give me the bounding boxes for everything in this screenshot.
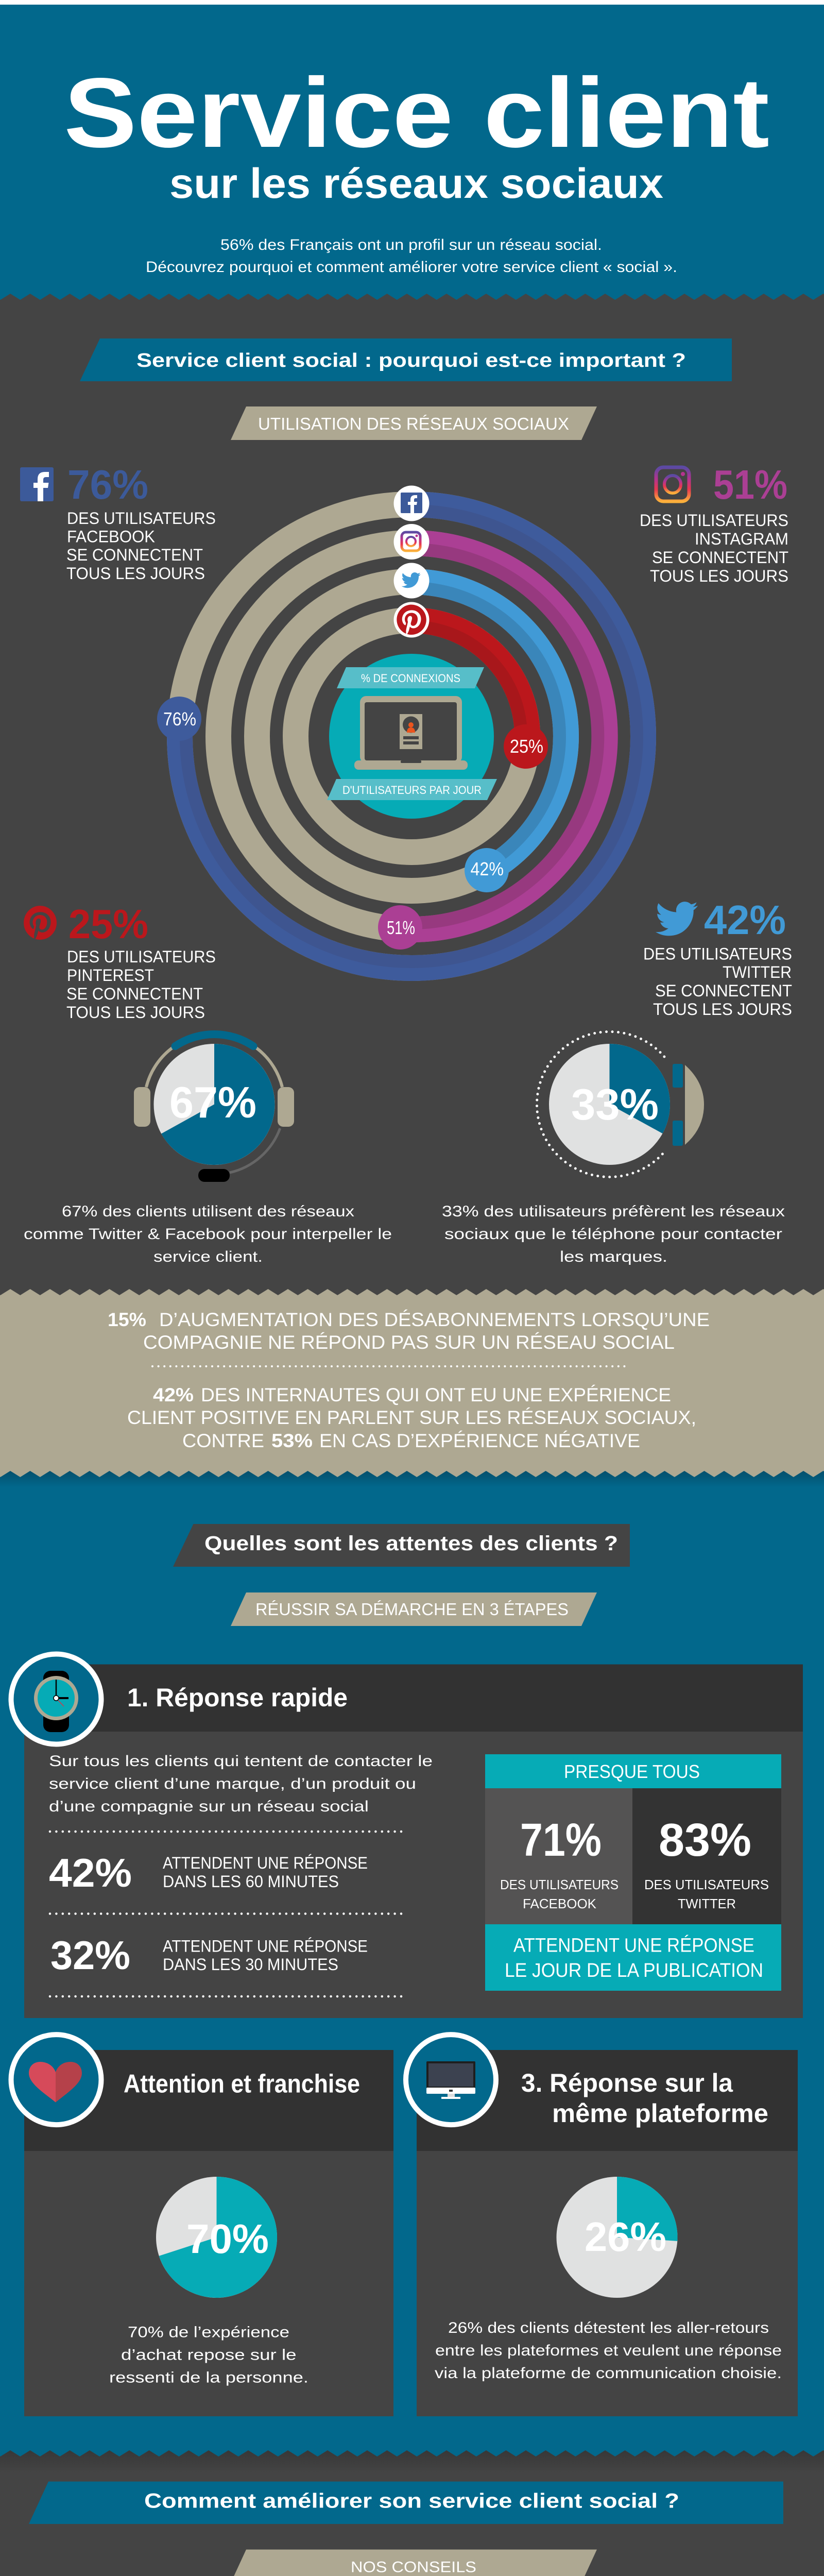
bubble: 51% bbox=[378, 905, 422, 950]
heading: attentes des clients: Quelles sont les attentes des clients ? bbox=[204, 1532, 618, 1555]
description: TWITTER bbox=[723, 963, 792, 981]
description: DES UTILISATEURS bbox=[67, 947, 216, 966]
text: 67% caption bbox=[24, 1203, 392, 1265]
description: TOUS LES JOURS bbox=[650, 567, 788, 585]
caption: ressenti de la personne. bbox=[109, 2369, 308, 2386]
stat: 42%: 42% bbox=[49, 1850, 132, 1895]
heading: pourquoi est-ce important: Service client social : pourquoi est-ce important ? bbox=[136, 350, 686, 371]
icon: monitor bbox=[406, 2035, 496, 2125]
description: DES UTILISATEURS bbox=[67, 509, 216, 528]
text: 33% caption bbox=[442, 1203, 785, 1265]
fact: 15%: COMPAGNIE NE RÉPOND PAS SUR UN RÉSEAU SOCIAL bbox=[143, 1332, 675, 1353]
panel title: Attention et franchise bbox=[124, 2069, 360, 2098]
bubble: 51%: 51% bbox=[387, 917, 415, 938]
intro text bbox=[49, 1753, 433, 1815]
ring: instagram 51% bbox=[400, 543, 605, 929]
intro text: Découvrez pourquoi et comment améliorer votre service client « social ». bbox=[146, 259, 677, 276]
text: 67% caption: 67% des clients utilisent des réseaux bbox=[62, 1203, 354, 1220]
stat: 71% facebook bbox=[500, 1815, 619, 1911]
fact: 42%: EN CAS D’EXPÉRIENCE NÉGATIVE bbox=[319, 1430, 640, 1451]
figure: 25% bbox=[68, 901, 148, 947]
fact: 15%: 15% bbox=[108, 1309, 146, 1330]
pie chart: 67% with headset: 67% bbox=[169, 1078, 256, 1127]
fact: 42% bbox=[127, 1384, 696, 1451]
ring: twitter 42% bbox=[411, 582, 566, 871]
ring: facebook 76% bbox=[180, 504, 643, 968]
figure: 42% bbox=[704, 897, 786, 943]
description: DES UTILISATEURS bbox=[640, 511, 788, 530]
stat: 32%: ATTENDENT UNE RÉPONSE bbox=[163, 1937, 368, 1956]
subtitle: sur les réseaux sociaux bbox=[169, 160, 663, 207]
icon: facebook bbox=[20, 467, 54, 501]
panel title: même plateforme bbox=[552, 2099, 768, 2128]
icon: headset bbox=[134, 1034, 294, 1182]
stat: 32%: DANS LES 30 MINUTES bbox=[163, 1955, 338, 1974]
description: SE CONNECTENT bbox=[652, 548, 788, 567]
intro text: d’une compagnie sur un réseau social bbox=[49, 1798, 369, 1815]
fact: 15%: D’AUGMENTATION DES DÉSABONNEMENTS LORSQU’UNE bbox=[159, 1309, 710, 1330]
subheading: réussir sa démarche bbox=[231, 1592, 597, 1626]
stat: 83% twitter: DES UTILISATEURS bbox=[644, 1877, 769, 1892]
bubble: 25%: 25% bbox=[510, 736, 543, 757]
stat: 42%: ATTENDENT UNE RÉPONSE bbox=[163, 1854, 368, 1872]
ring tracks bbox=[180, 504, 643, 968]
bubble: 42%: 42% bbox=[471, 858, 504, 879]
heading: attentes des clients bbox=[173, 1524, 630, 1567]
pie chart: 26% bbox=[556, 2177, 678, 2298]
fact: 42%: 53% bbox=[271, 1430, 313, 1451]
intro text: Sur tous les clients qui tentent de contacter le bbox=[49, 1753, 433, 1770]
ribbon: d'utilisateurs par jour bbox=[327, 779, 497, 800]
caption: via la plateforme de communication choisie. bbox=[435, 2365, 782, 2382]
header bbox=[64, 57, 769, 276]
caption: 70% de l’expérience bbox=[128, 2324, 289, 2341]
icon: watch bbox=[11, 1654, 101, 1744]
subheading: nos conseils bbox=[231, 2550, 597, 2576]
callout table: presque tous: PRESQUE TOUS bbox=[564, 1761, 700, 1782]
pie chart: 33% with phone bbox=[537, 1031, 704, 1177]
description: SE CONNECTENT bbox=[66, 546, 203, 564]
description: SE CONNECTENT bbox=[66, 985, 203, 1003]
subheading: utilisation des réseaux sociaux: UTILISATION DES RÉSEAUX SOCIAUX bbox=[258, 414, 569, 433]
description: DES UTILISATEURS bbox=[643, 945, 792, 963]
fact: 42%: 42% bbox=[153, 1384, 194, 1405]
caption: entre les plateformes et veulent une réponse bbox=[435, 2342, 782, 2359]
radial chart: % de connexions d'utilisateurs par jour bbox=[157, 485, 643, 968]
icon: pinterest badge bbox=[393, 602, 430, 638]
description: TOUS LES JOURS bbox=[653, 1000, 792, 1019]
description: PINTEREST bbox=[67, 966, 154, 985]
stat: 42% bbox=[49, 1850, 368, 1895]
panel title: 1. Réponse rapide bbox=[127, 1683, 348, 1712]
ring: pinterest 25% bbox=[411, 620, 527, 747]
stat: 32% bbox=[50, 1933, 368, 1978]
heading: comment améliorer: Comment améliorer son service client social ? bbox=[144, 2490, 679, 2513]
heading: comment améliorer bbox=[29, 2482, 783, 2524]
fact: 42%: CLIENT POSITIVE EN PARLENT SUR LES RÉSEAUX SOCIAUX, bbox=[127, 1407, 696, 1428]
caption bbox=[435, 2319, 782, 2382]
pie chart: 33% with phone: 33% bbox=[571, 1080, 659, 1129]
description: INSTAGRAM bbox=[695, 530, 788, 548]
bubble: 76%: 76% bbox=[163, 708, 196, 730]
stat: facebook 76% bbox=[20, 462, 216, 583]
stat: 42%: DANS LES 60 MINUTES bbox=[163, 1872, 339, 1891]
icon: pinterest bbox=[24, 906, 57, 940]
stat: instagram 51% bbox=[640, 462, 788, 585]
description: TOUS LES JOURS bbox=[66, 564, 205, 583]
panel: 1. réponse rapide bbox=[11, 1654, 803, 2018]
icon: twitter bbox=[656, 902, 698, 936]
stat: 83% twitter bbox=[644, 1815, 769, 1911]
panel title: 3. Réponse sur la bbox=[521, 2069, 733, 2097]
text: 33% caption: sociaux que le téléphone pour contacter bbox=[444, 1226, 782, 1243]
pie chart: 70% bbox=[156, 2177, 277, 2298]
description: TOUS LES JOURS bbox=[66, 1003, 205, 1022]
intro text: service client d’une marque, d’un produit ou bbox=[49, 1775, 416, 1792]
icon: facebook badge bbox=[393, 485, 430, 521]
figure: 76% bbox=[67, 462, 148, 507]
icon: instagram badge bbox=[393, 524, 430, 560]
stat: 71% facebook: 71% bbox=[520, 1815, 602, 1866]
figure: 51% bbox=[713, 462, 787, 507]
description bbox=[640, 511, 788, 585]
panel: 3. réponse sur la même plateforme bbox=[406, 2035, 798, 2416]
ribbon: % de connexions: % DE CONNEXIONS bbox=[361, 672, 460, 685]
intro text bbox=[146, 236, 677, 276]
stat: 83% twitter: TWITTER bbox=[678, 1896, 736, 1911]
stat: twitter 42% bbox=[643, 897, 792, 1019]
stat: 32%: 32% bbox=[50, 1933, 130, 1978]
caption bbox=[109, 2324, 308, 2386]
description bbox=[66, 947, 216, 1022]
subheading: utilisation des réseaux sociaux bbox=[231, 406, 597, 440]
text: 67% caption: service client. bbox=[153, 1248, 263, 1265]
stat: pinterest 25% bbox=[24, 901, 216, 1022]
description bbox=[66, 509, 216, 583]
subheading: nos conseils: NOS CONSEILS bbox=[351, 2559, 476, 2576]
text: 67% caption: comme Twitter & Facebook pour interpeller le bbox=[24, 1226, 392, 1243]
stat: 83% twitter: 83% bbox=[659, 1815, 751, 1866]
icon: heart bbox=[11, 2035, 101, 2125]
description bbox=[643, 945, 792, 1019]
pie chart: 70%: 70% bbox=[186, 2216, 269, 2262]
panel: attention et franchise bbox=[11, 2035, 393, 2416]
intro text: 56% des Français ont un profil sur un réseau social. bbox=[220, 236, 602, 253]
pie chart: 67% with headset bbox=[134, 1034, 294, 1182]
bubble: 42% bbox=[465, 848, 509, 892]
center disc bbox=[329, 654, 494, 819]
ribbon: d'utilisateurs par jour: D'UTILISATEURS PAR JOUR bbox=[342, 784, 482, 796]
fact: 15% bbox=[108, 1309, 710, 1353]
subheading: réussir sa démarche: RÉUSSIR SA DÉMARCHE EN 3 ÉTAPES bbox=[255, 1600, 569, 1619]
caption: 26% des clients détestent les aller-retours bbox=[448, 2319, 769, 2336]
title: Service client bbox=[64, 57, 769, 168]
icon: twitter badge bbox=[393, 563, 430, 599]
fact: 42%: CONTRE bbox=[182, 1430, 264, 1451]
stat: 71% facebook: FACEBOOK bbox=[523, 1896, 597, 1911]
callout table: presque tous bbox=[485, 1754, 781, 1991]
caption: d’achat repose sur le bbox=[121, 2347, 297, 2364]
bubble: 76% bbox=[157, 697, 201, 741]
callout table: presque tous: LE JOUR DE LA PUBLICATION bbox=[505, 1960, 763, 1981]
pie chart: 26%: 26% bbox=[585, 2214, 666, 2260]
panel title bbox=[521, 2069, 768, 2128]
description: SE CONNECTENT bbox=[655, 981, 792, 1000]
panel: key facts band bbox=[108, 1309, 710, 1451]
text: 33% caption: 33% des utilisateurs préfèrent les réseaux bbox=[442, 1203, 785, 1220]
icon: laptop with profile card bbox=[354, 696, 468, 770]
stat: 71% facebook: DES UTILISATEURS bbox=[500, 1877, 619, 1892]
description: FACEBOOK bbox=[67, 528, 155, 546]
text: 33% caption: les marques. bbox=[560, 1248, 667, 1265]
heading: pourquoi est-ce important bbox=[80, 338, 732, 381]
callout table: presque tous: ATTENDENT UNE RÉPONSE bbox=[513, 1934, 754, 1957]
ribbon: % de connexions bbox=[337, 667, 484, 688]
bubble: 25% bbox=[504, 724, 548, 769]
fact: 42%: DES INTERNAUTES QUI ONT EU UNE EXPÉRIENCE bbox=[201, 1384, 671, 1405]
icon: instagram bbox=[656, 467, 689, 501]
icon: phone bbox=[537, 1031, 704, 1177]
